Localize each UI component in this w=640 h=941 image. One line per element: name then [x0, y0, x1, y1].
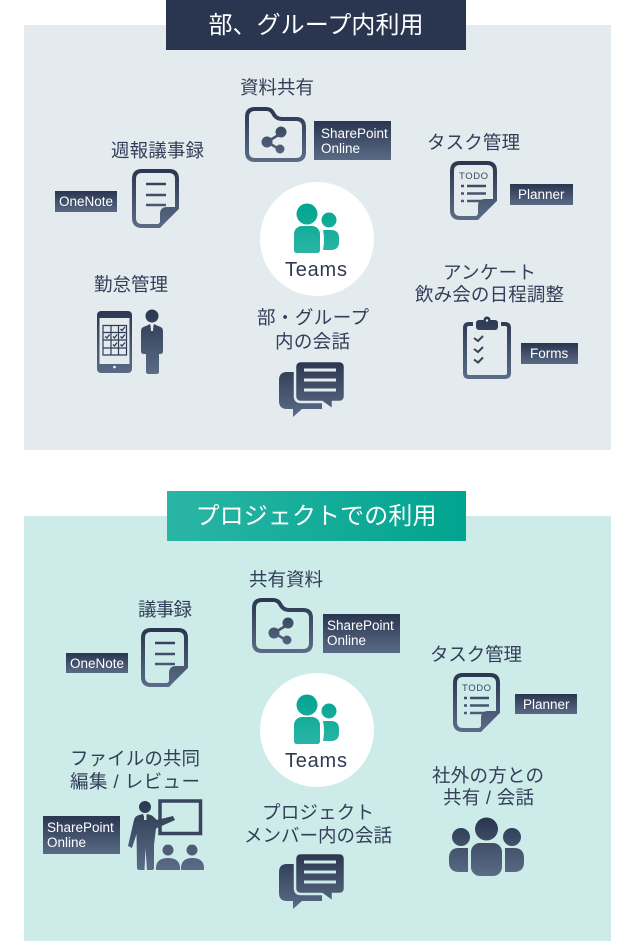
icon: todo list: TODO: [459, 171, 489, 182]
label: minutes: 議事録: [138, 599, 192, 620]
tag: SharePoint Online: SharePoint: [327, 618, 394, 633]
label: task management: タスク管理: [430, 644, 522, 665]
icon: todo list: [455, 675, 500, 732]
tag: Planner: [515, 694, 577, 714]
hub: Teams: [260, 182, 374, 296]
icon: document: [143, 630, 188, 687]
tag: Planner: Planner: [523, 697, 570, 712]
hub: Teams: Teams: [285, 750, 347, 772]
label: shared documents: 資料共有: [240, 77, 314, 98]
label: team conversation: 部・グループ: [257, 307, 369, 328]
tag: OneNote: [55, 191, 117, 212]
icon: clipboard checklist: [465, 316, 509, 377]
panel background: [24, 516, 611, 941]
tag: SharePoint Online: [314, 121, 391, 160]
label: team conversation: [257, 307, 369, 352]
label: weekly reports and minutes: 週報議事録: [111, 140, 204, 161]
label: file co-editing and review: [70, 748, 200, 792]
tag: OneNote: [66, 653, 128, 673]
tag: SharePoint Online: Online: [321, 141, 360, 156]
icon: shared folder: [254, 600, 311, 651]
icon: presenter with audience: [128, 801, 204, 870]
icon: group of people: [449, 818, 524, 876]
tag: SharePoint Online: SharePoint: [321, 126, 388, 141]
heading: team and department use: [166, 0, 466, 50]
label: sharing with external people: 共有 / 会話: [443, 787, 534, 808]
tag: SharePoint Online: [323, 614, 400, 653]
label: announcements and scheduling: 飲み会の日程調整: [415, 284, 564, 305]
panel: team and department use: [24, 0, 611, 450]
heading: project use: プロジェクトでの利用: [196, 503, 436, 530]
label: project member conversation: プロジェクト: [262, 802, 374, 823]
label: task management: タスク管理: [427, 132, 520, 153]
label: sharing with external people: 社外の方との: [432, 765, 544, 786]
tag: SharePoint Online: SharePoint: [47, 820, 114, 835]
icon: document: [134, 171, 179, 228]
tag: Planner: Planner: [518, 187, 565, 202]
panel: project use: [24, 491, 611, 941]
tag: OneNote: OneNote: [59, 194, 113, 209]
tag: Planner: [510, 184, 573, 205]
label: project member conversation: メンバー内の会話: [244, 825, 392, 846]
hub: Teams: [260, 673, 374, 787]
heading: team and department use: 部、グループ内利用: [208, 12, 424, 39]
label: sharing with external people: [432, 765, 544, 808]
label: announcements and scheduling: アンケート: [443, 262, 536, 283]
label: project member conversation: [244, 802, 392, 846]
label: attendance management: 勤怠管理: [94, 274, 168, 295]
icon: chat bubbles: [279, 853, 345, 909]
tag: SharePoint Online: Online: [327, 633, 366, 648]
heading: project use: [167, 491, 466, 541]
tag: OneNote: OneNote: [70, 656, 124, 671]
tag: SharePoint Online: Online: [47, 835, 86, 850]
label: shared documents: 共有資料: [249, 569, 323, 590]
icon: todo list: [452, 163, 497, 220]
label: announcements and scheduling: [415, 262, 564, 305]
label: file co-editing and review: ファイルの共同: [70, 748, 200, 769]
icon: todo list: TODO: [462, 683, 492, 694]
label: file co-editing and review: 編集 / レビュー: [70, 771, 200, 792]
tag: Forms: Forms: [530, 346, 568, 361]
tag: Forms: [521, 343, 578, 364]
label: team conversation: 内の会話: [275, 331, 350, 352]
icon: chat bubbles: [279, 361, 345, 417]
hub: Teams: Teams: [285, 259, 347, 281]
icon: shared folder: [247, 109, 304, 160]
icon: tablet and person: [97, 310, 163, 374]
tag: SharePoint Online: [43, 816, 120, 854]
panel background: [24, 25, 611, 450]
